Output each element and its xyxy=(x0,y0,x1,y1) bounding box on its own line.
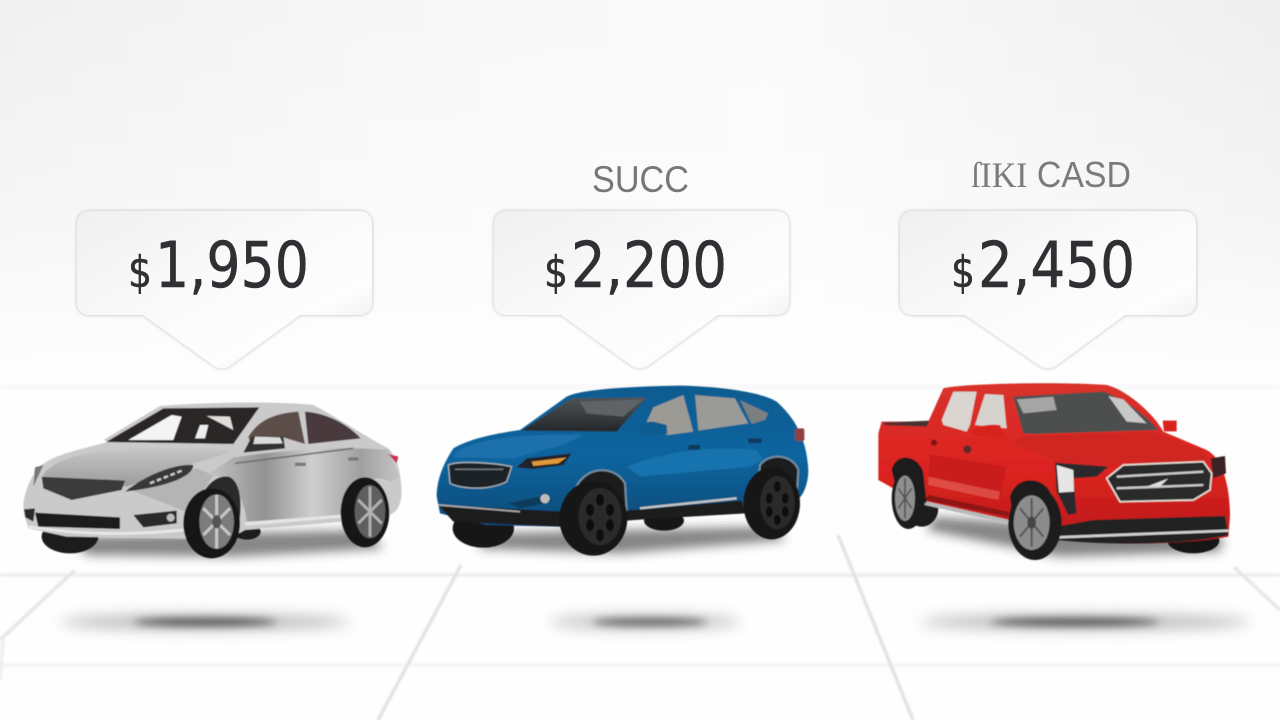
price: $1,950: $ xyxy=(128,247,152,298)
price: $2,200: $ xyxy=(544,247,568,298)
car: red pickup truck xyxy=(878,383,1230,560)
price bubble: truck xyxy=(900,211,1196,368)
price: $2,450: $ xyxy=(951,247,975,298)
car: silver sedan xyxy=(23,403,402,558)
floor shadow: truck xyxy=(920,614,1250,630)
price bubble: sedan xyxy=(77,211,372,368)
label: IKI CASD: ſIKI CASD xyxy=(971,154,1131,195)
price bubble: SUV xyxy=(494,211,789,368)
floor shadow: SUV xyxy=(550,614,740,630)
floor shadow: sedan xyxy=(60,614,350,630)
price: $2,200: 2,200 xyxy=(571,229,727,302)
floor tiles xyxy=(0,385,1280,720)
label: SUCC: SUCC xyxy=(592,159,689,200)
price: $1,950: 1,950 xyxy=(155,229,309,302)
price: $2,450: 2,450 xyxy=(978,229,1135,302)
car: blue SUV xyxy=(437,386,808,556)
background wall xyxy=(0,0,1280,390)
